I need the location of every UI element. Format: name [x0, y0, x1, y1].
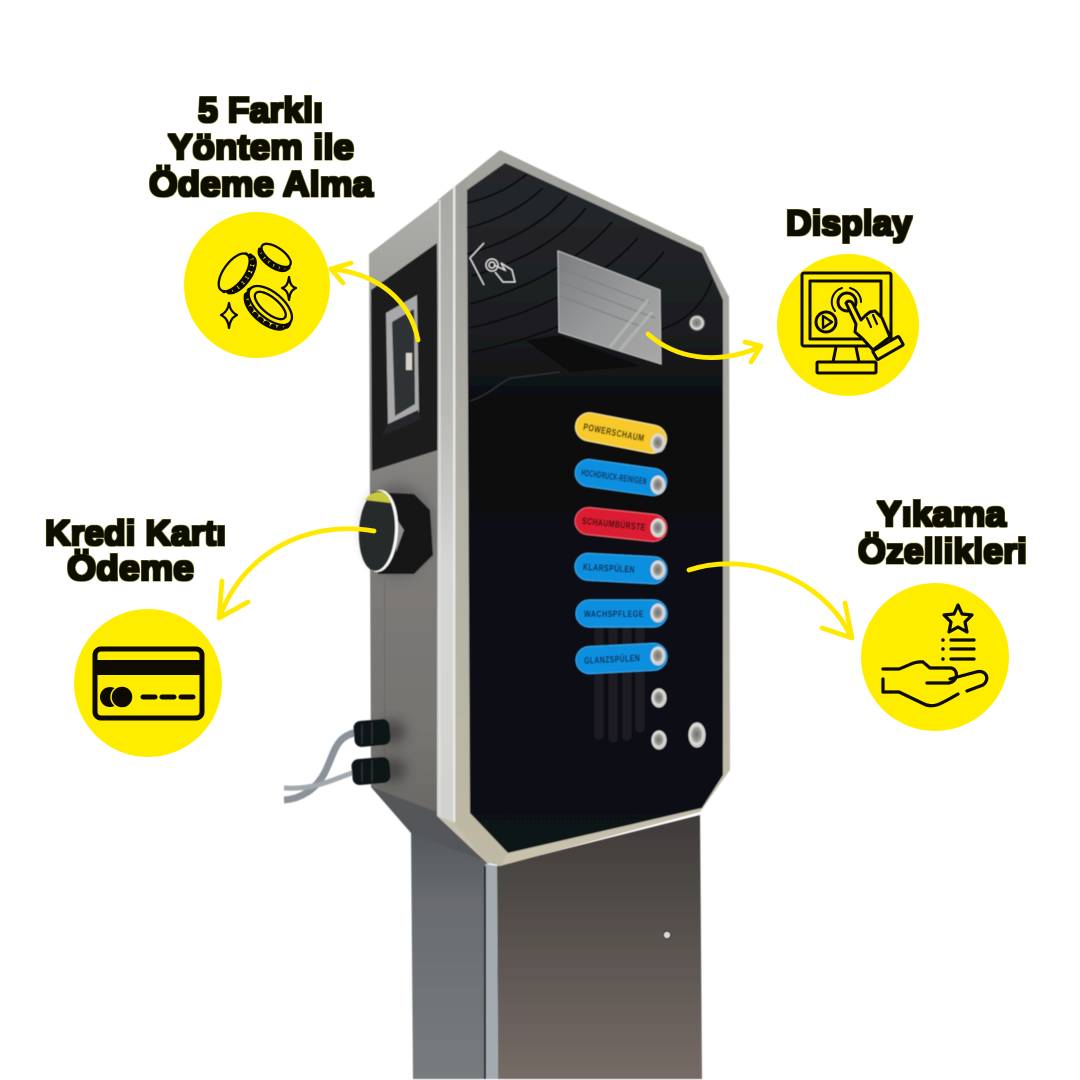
- heading: 5 Farklı Yöntem ile Ödeme Alma: 5 Farklı: [198, 91, 323, 130]
- heading: Kredi Kartı Ödeme: Kredi Kartı: [45, 514, 226, 553]
- button label: Klarspülen: KLARSPÜLEN: [583, 562, 635, 576]
- arrow: wash buttons to features: [689, 564, 852, 638]
- icon: hand with star in yellow circle: [861, 583, 1009, 731]
- sparkle left: [221, 303, 237, 328]
- display screen: [558, 251, 661, 364]
- button label: Hochdruck-Reinigen: [573, 458, 668, 497]
- faint hoses reflection: [599, 628, 640, 738]
- heading: Yıkama Özellikleri: Özellikleri: [858, 532, 1027, 571]
- icon: coins in yellow circle: [184, 212, 330, 358]
- arrow: screen to display: [648, 334, 761, 362]
- payment terminal photo: [284, 150, 730, 1079]
- heading: 5 Farklı Yöntem ile Ödeme Alma: Yöntem ile: [168, 128, 354, 167]
- front frame: [437, 150, 730, 866]
- button label: Powerschaum: [573, 410, 669, 456]
- coin bottom: [238, 279, 299, 337]
- coin left: [213, 247, 262, 300]
- button label: Glanzspülen: GLANZSPÜLEN: [584, 653, 640, 667]
- side housing: [364, 198, 490, 864]
- button label: Schaumbürste: [574, 506, 668, 543]
- metal push buttons: [651, 434, 705, 749]
- card reader panel: [371, 243, 438, 471]
- coin top: [255, 239, 294, 275]
- lower pole: [411, 815, 702, 1079]
- arrow: card slot to coins: [331, 263, 418, 340]
- icon: touch display in yellow circle: [777, 254, 919, 396]
- button label: Hochdruck-Reinigen: HOCHDRUCK-REINIGEN: [580, 467, 647, 488]
- heading: Display: Display: [786, 204, 913, 243]
- heading: Kredi Kartı Ödeme: [45, 514, 226, 588]
- heading: 5 Farklı Yöntem ile Ödeme Alma: Ödeme Alma: [149, 165, 374, 204]
- heading: 5 Farklı Yöntem ile Ödeme Alma: [149, 91, 374, 204]
- cables and cable glands: [284, 718, 391, 800]
- heading: Yıkama Özellikleri: Yıkama: [877, 495, 1007, 534]
- round card terminal: [357, 489, 433, 574]
- button label: Klarspülen: [574, 553, 668, 584]
- button label: Glanzspülen: [575, 643, 668, 674]
- button label: Wachspflege: WACHSPFLEGE: [584, 609, 644, 620]
- black glass panel: [467, 163, 723, 853]
- heading: Kredi Kartı Ödeme: Ödeme: [67, 549, 194, 588]
- icon: credit card in yellow circle: [74, 609, 222, 757]
- heading: Yıkama Özellikleri: [858, 495, 1027, 571]
- button label: Schaumbürste: SCHAUMBÜRSTE: [581, 516, 646, 534]
- button label: Wachspflege: [576, 600, 667, 627]
- service button: [690, 316, 704, 330]
- ceiling reflection lines: [467, 174, 712, 352]
- arrow: card terminal to credit card: [219, 529, 374, 618]
- button label: Powerschaum: POWERSCHAUM: [582, 422, 645, 444]
- contactless symbol: [470, 243, 515, 285]
- sparkle right: [282, 277, 296, 300]
